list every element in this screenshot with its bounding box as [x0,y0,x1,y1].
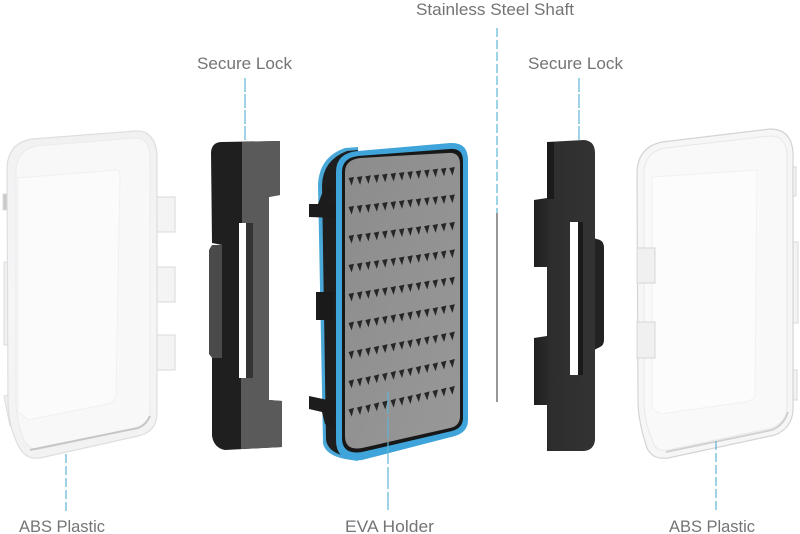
panel: right clear ABS plastic lid [637,129,798,458]
right lid inner panel [652,170,757,414]
left lid shell [7,131,157,458]
panel: central EVA fly box [309,143,468,461]
right lid bottom edge shading [666,412,788,452]
box rear body [318,147,358,461]
panel: right secure lock [534,140,604,451]
leader lines [66,28,716,511]
left lid side tabs [3,194,16,426]
box top clip [309,186,337,218]
box bottom clip [309,396,337,428]
panel: left clear ABS plastic lid [3,131,175,458]
right lock slot [570,222,578,375]
label: right secure lock: Secure Lock [528,54,623,73]
EVA grey foam holder [345,153,460,448]
label: left secure lock: Secure Lock [197,54,292,73]
right lock body [534,140,595,451]
left lock outer tab [209,245,225,359]
box black inner frame [342,149,463,452]
box middle clip [316,292,334,320]
right lock outer tab [590,237,604,352]
left lid inner panel [18,170,120,420]
left lock slot [239,223,246,378]
right lid shell [637,129,793,458]
right lid side tabs [637,248,655,358]
EVA foam slits [348,167,455,418]
panel: left secure lock [209,141,282,450]
left lid hinge tabs [146,197,175,370]
box blue rim [336,143,468,460]
left lock body [211,141,282,450]
left lid bottom edge shading [30,416,150,450]
label: stainless steel shaft: Stainless Steel Shaft [416,0,574,19]
stainless steel shaft [496,213,498,402]
right lid hinge tabs [786,167,798,400]
left lock lighter face [241,141,282,449]
